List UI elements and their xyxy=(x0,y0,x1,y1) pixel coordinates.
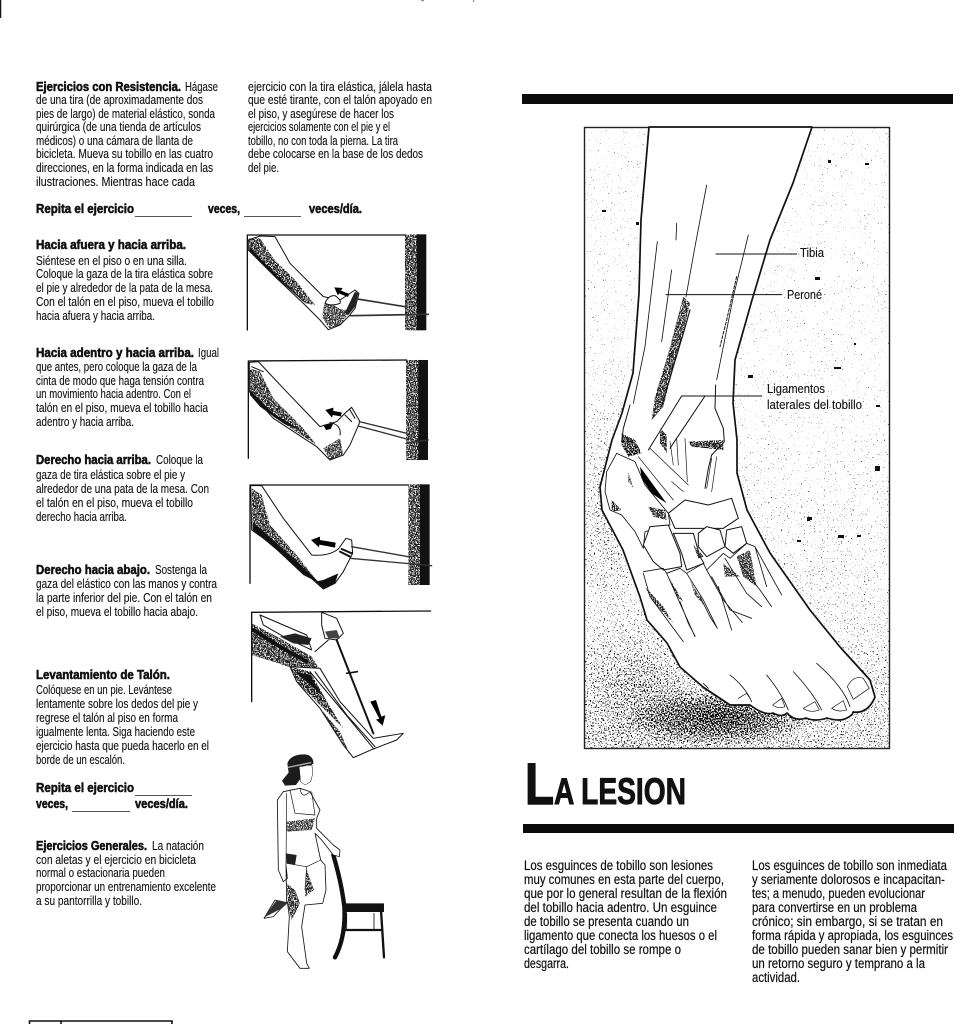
text block: derecho hacia arriba: derecho hacia arriba. xyxy=(36,510,127,524)
text block: ejercicios con resistencia: que esté tirante, con el talón apoyado en xyxy=(248,93,432,107)
text block: ejercicios generales: proporcionar un entrenamiento excelente xyxy=(36,880,216,894)
text block: derecho hacia abajo: la parte inferior del pie. Con el talón en xyxy=(36,591,212,605)
repeat line 2: veces, xyxy=(36,797,68,811)
text column 2: la lesion: un retorno seguro y temprano a la xyxy=(752,956,925,971)
text column 2: la lesion xyxy=(752,858,953,985)
illustration: straight down with hands xyxy=(252,611,431,765)
illustration: straight up with band xyxy=(250,484,432,589)
text block: ejercicios con resistencia: quirúrgica (de una tienda de artículos xyxy=(36,120,201,134)
text block: hacia afuera y hacia arriba xyxy=(36,238,214,323)
text block: derecho hacia abajo: Sostenga la xyxy=(155,563,207,577)
text block: levantamiento de talon: regrese el talón al piso en forma xyxy=(36,711,178,725)
text block: ejercicios generales: con aletas y el ejercicio en bicicleta xyxy=(36,853,196,867)
text block: ejercicios con resistencia: bicicleta. Mueva su tobillo en las cuatro xyxy=(36,147,213,161)
text block: hacia adentro y hacia arriba: cinta de modo que haga tensión contra xyxy=(36,374,204,388)
text block: hacia afuera y hacia arriba: el pie y alrededor de la pata de la mesa. xyxy=(36,281,213,295)
text block: hacia adentro y hacia arriba xyxy=(36,346,219,429)
text block: hacia adentro y hacia arriba: talón en el piso, mueva el tobillo hacia xyxy=(36,401,208,415)
text column 1: la lesion: ligamento que conecta los huesos o el xyxy=(524,928,717,943)
text block: derecho hacia arriba: Coloque la xyxy=(156,453,203,467)
text block: ejercicios con resistencia: de una tira (de aproximadamente dos xyxy=(36,93,203,107)
text block: ejercicios con resistencia: Ejercicios con Resistencia. xyxy=(36,80,181,94)
text block: derecho hacia arriba: el talón en el piso, mueva el tobillo xyxy=(36,496,193,510)
text column 1: la lesion: de tobillo se presenta cuando un xyxy=(524,914,689,929)
text block: ejercicios con resistencia: ejercicios solamente con el pie y el xyxy=(248,120,390,134)
text block: hacia adentro y hacia arriba: un movimiento hacia adentro. Con el xyxy=(36,387,191,401)
labels: tibia, perone, ligamentos: Tibia xyxy=(800,245,825,260)
text block: derecho hacia arriba: Derecho hacia arriba. xyxy=(36,453,151,467)
text block: hacia adentro y hacia arriba: Igual xyxy=(198,346,219,360)
leg and foot outline xyxy=(600,127,875,720)
title xyxy=(525,752,686,817)
text block: ejercicios con resistencia xyxy=(36,80,432,189)
text block: levantamiento de talon: igualmente lenta. Siga haciendo este xyxy=(36,725,195,739)
text block: ejercicios con resistencia: del pie. xyxy=(248,161,279,175)
chair xyxy=(333,855,384,957)
text block: ejercicios generales: a su pantorrilla y tobillo. xyxy=(36,894,142,908)
illustration: ankle out and up with band xyxy=(247,234,428,330)
text column 2: la lesion: tes; a menudo, pueden evolucionar xyxy=(752,886,925,901)
text block: hacia afuera y hacia arriba: Con el talón en el piso, mueva el tobillo xyxy=(36,295,214,309)
illustration: ankle in and up with band xyxy=(248,360,428,460)
foot bones and toes xyxy=(643,525,869,711)
text block: derecho hacia arriba xyxy=(36,453,209,524)
text column 2: la lesion: para convertirse en un problema xyxy=(752,900,917,915)
text column 1: la lesion: desgarra. xyxy=(524,956,569,971)
text column 1: la lesion: muy comunes en esta parte del cuerpo, xyxy=(524,872,724,887)
text block: hacia adentro y hacia arriba: que antes, pero coloque la gaza de la xyxy=(36,360,197,374)
leg and body outline xyxy=(264,788,340,968)
text block: hacia afuera y hacia arriba: hacia afuera y hacia arriba. xyxy=(36,309,155,323)
text block: ejercicios con resistencia: ilustraciones. Mientras hace cada xyxy=(36,175,195,189)
ankle bones and ligaments xyxy=(605,385,738,548)
title: A LESION xyxy=(554,771,686,812)
larger black flecks xyxy=(602,160,880,542)
title: L xyxy=(525,752,554,817)
repeat line 2: Repita el ejercicio xyxy=(36,781,134,795)
repeat line 2 xyxy=(36,781,192,812)
labels: tibia, perone, ligamentos: Peroné xyxy=(787,287,822,302)
text block: hacia afuera y hacia arriba: Siéntese en el piso o en una silla. xyxy=(36,254,187,268)
text block: derecho hacia abajo: el piso, mueva el tobillo hacia abajo. xyxy=(36,605,198,619)
text column 2: la lesion: y seriamente dolorosos e incapacitan- xyxy=(752,872,945,887)
anatomy figure xyxy=(550,127,890,780)
text column 2: la lesion: crónico; sin embargo, si se tratan en xyxy=(752,914,943,929)
text column 1: la lesion: cartílago del tobillo se rompe o xyxy=(524,942,681,957)
repeat line 1 xyxy=(36,202,362,216)
text block: hacia afuera y hacia arriba: Coloque la gaza de la tira elástica sobre xyxy=(36,267,213,281)
text block: hacia adentro y hacia arriba: adentro y hacia arriba. xyxy=(36,415,134,429)
text block: derecho hacia arriba: alrededor de una pata de la mesa. Con xyxy=(36,482,209,496)
text block: derecho hacia abajo xyxy=(36,563,217,619)
text block: ejercicios generales: Ejercicios Generales. xyxy=(36,839,147,853)
text block: derecho hacia arriba: gaza de tira elástica sobre el pie y xyxy=(36,468,186,482)
text block: ejercicios con resistencia: tobillo, no con toda la pierna. La tira xyxy=(248,134,398,148)
text column 1: la lesion: del tobillo hacia adentro. Un esguince xyxy=(524,900,717,915)
text block: ejercicios con resistencia: el piso, y asegúrese de hacer los xyxy=(248,107,394,121)
leader lines xyxy=(648,254,797,450)
text block: levantamiento de talon: Levantamiento de Talón. xyxy=(36,668,170,682)
labels: tibia, perone, ligamentos: laterales del tobillo xyxy=(767,397,862,412)
text block: ejercicios con resistencia: direcciones, en la forma indicada en las xyxy=(36,161,213,175)
text column 1: la lesion: Los esguinces de tobillo son lesiones xyxy=(524,858,713,873)
labels: tibia, perone, ligamentos xyxy=(767,245,862,412)
text block: derecho hacia abajo: gaza del elástico con las manos y contra xyxy=(36,577,217,591)
text block: hacia afuera y hacia arriba: Hacia afuera y hacia arriba. xyxy=(36,238,186,252)
labels: tibia, perone, ligamentos: Ligamentos xyxy=(767,381,825,396)
text block: levantamiento de talon xyxy=(36,668,209,767)
text block: ejercicios con resistencia: Hágase xyxy=(185,80,218,94)
bottom page box xyxy=(30,1021,172,1024)
text block: levantamiento de talon: lentamente sobre los dedos del pie y xyxy=(36,697,199,711)
top rule xyxy=(522,94,953,104)
text block: ejercicios generales xyxy=(36,839,216,908)
bottom rule xyxy=(523,824,954,833)
repeat line 1: Repita el ejercicio xyxy=(36,202,134,216)
illustration: woman standing with chair xyxy=(264,754,384,968)
text block: ejercicios con resistencia: ejercicio con la tira elástica, jálela hasta xyxy=(248,80,432,94)
text block: derecho hacia abajo: Derecho hacia abajo. xyxy=(36,563,150,577)
speckled ground texture xyxy=(550,128,889,780)
scan marks at top edge xyxy=(0,0,474,18)
text block: hacia adentro y hacia arriba: Hacia adentro y hacia arriba. xyxy=(36,346,194,360)
text block: ejercicios con resistencia: médicos) o una cámara de llanta de xyxy=(36,134,193,148)
text block: ejercicios con resistencia: pies de largo) de material elástico, sonda xyxy=(36,107,215,121)
text block: levantamiento de talon: ejercicio hasta que pueda hacerlo en el xyxy=(36,739,209,753)
text block: ejercicios generales: normal o estacionaria pueden xyxy=(36,866,165,880)
text column 1: la lesion xyxy=(524,858,727,971)
text block: levantamiento de talon: borde de un escalón. xyxy=(36,753,125,767)
text block: ejercicios generales: La natación xyxy=(152,839,204,853)
repeat line 2: veces/día. xyxy=(135,797,188,811)
text column 2: la lesion: actividad. xyxy=(752,970,800,985)
text column 1: la lesion: que por lo general resultan de la flexión xyxy=(524,886,727,901)
repeat line 1: veces, xyxy=(208,202,240,216)
text block: ejercicios con resistencia: debe colocarse en la base de los dedos xyxy=(248,147,423,161)
shin lines and shading xyxy=(633,185,748,420)
repeat line 1: veces/día. xyxy=(309,202,362,216)
text block: levantamiento de talon: Colóquese en un pie. Levántese xyxy=(36,683,172,697)
